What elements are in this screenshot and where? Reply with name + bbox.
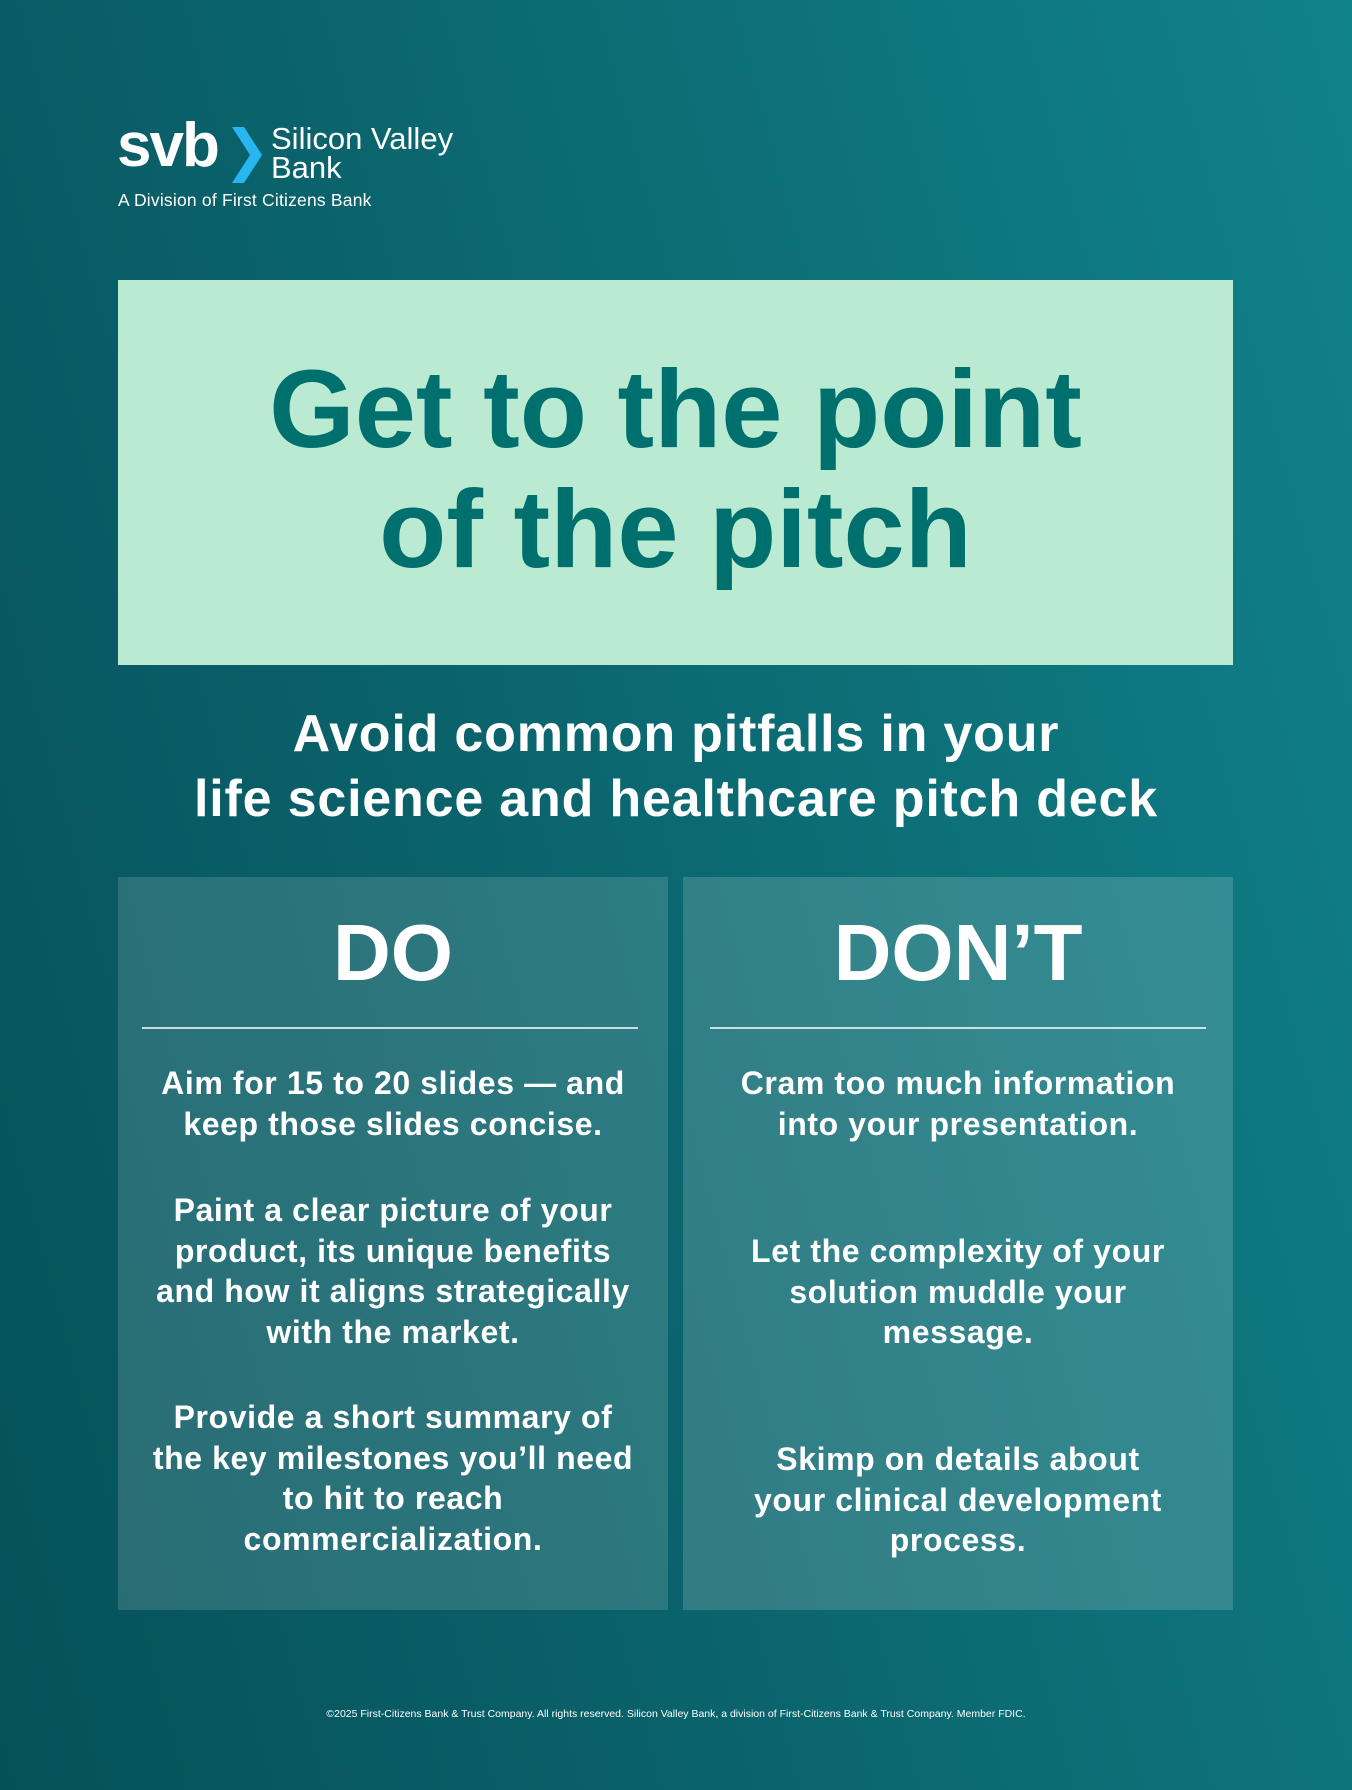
logo: svb wordmark: svb	[117, 111, 218, 180]
icon: chevron	[232, 127, 262, 183]
text: do 3: to hit to reach	[283, 1480, 503, 1516]
text: dont 3: Skimp on details about	[776, 1441, 1140, 1477]
text: do 2: with the market.	[266, 1314, 520, 1350]
text: do 2: Paint a clear picture of your	[174, 1192, 612, 1228]
subtitle: life science and healthcare pitch deck	[194, 770, 1158, 828]
text: dont 1: into your presentation.	[778, 1106, 1138, 1142]
text: dont 3: your clinical development	[754, 1482, 1162, 1518]
text: do 1: Aim for 15 to 20 slides — and	[161, 1065, 625, 1101]
footer: ©2025 First-Citizens Bank & Trust Company. All rights reserved. Silicon Valley Bank, a division of First-Citizens Bank & Trust Company. Member FDIC.	[326, 1708, 1026, 1720]
text: do 1: keep those slides concise.	[183, 1106, 603, 1142]
text: do 1	[161, 1065, 625, 1142]
logo: bank name: Silicon Valley	[271, 121, 453, 156]
title: of the pitch	[379, 468, 972, 591]
title: Get to the point	[269, 348, 1082, 471]
subtitle	[194, 705, 1158, 828]
logo: bank name	[271, 121, 453, 185]
text: dont 2: Let the complexity of your	[751, 1233, 1165, 1269]
logo	[117, 111, 453, 210]
panel: DO	[118, 877, 668, 1610]
subtitle: Avoid common pitfalls in your	[293, 705, 1059, 763]
text: do 3: the key milestones you’ll need	[153, 1440, 633, 1476]
logo: bank name: Bank	[271, 150, 342, 185]
text: dont 2	[751, 1233, 1165, 1350]
text: do 3: commercialization.	[244, 1520, 542, 1556]
text: do 3	[153, 1399, 633, 1556]
logo: tagline: A Division of First Citizens Bank	[118, 190, 372, 210]
text: dont 2: solution muddle your	[789, 1274, 1127, 1310]
title box	[118, 280, 1233, 665]
text: dont 3: process.	[890, 1522, 1026, 1558]
text: dont 1	[741, 1065, 1175, 1142]
heading: DO: DO	[333, 908, 453, 997]
heading: DON'T: DON’T	[834, 908, 1082, 997]
text: dont 2: message.	[883, 1314, 1033, 1350]
text: do 3: Provide a short summary of	[174, 1399, 612, 1435]
text: do 2	[156, 1192, 630, 1350]
text: do 2: product, its unique benefits	[175, 1232, 611, 1268]
text: dont 1: Cram too much information	[741, 1065, 1175, 1101]
title	[269, 348, 1082, 591]
text: do 2: and how it aligns strategically	[156, 1273, 630, 1309]
text: dont 3	[754, 1441, 1162, 1558]
panel: DON'T	[683, 877, 1233, 1610]
